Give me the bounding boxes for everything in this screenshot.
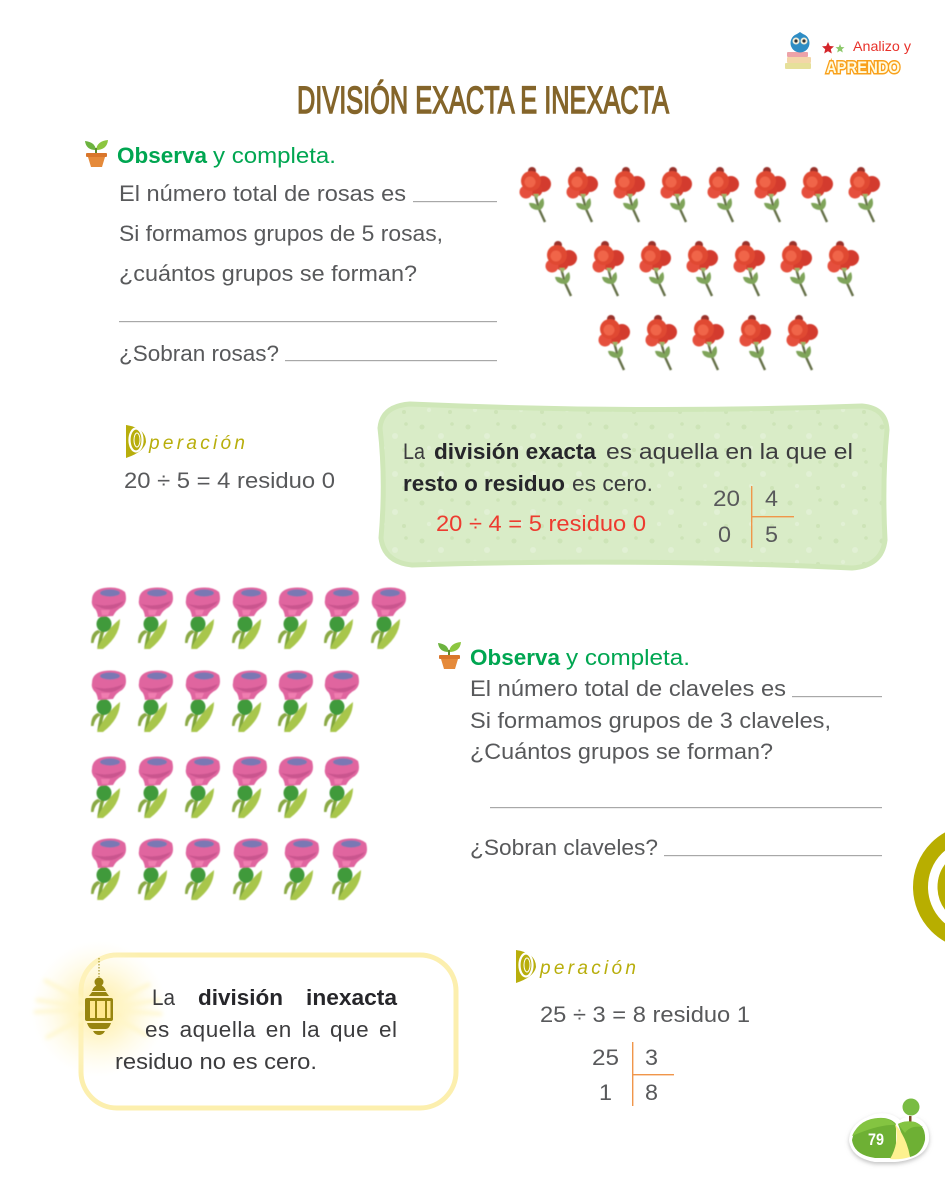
division layout: 25 (592, 1045, 619, 1070)
heading: Observa y completa (117, 143, 336, 168)
text: 20 ÷ 5: 20 ÷ 5 = 4 residuo 0 (124, 468, 335, 493)
icon: plant pot (85, 140, 108, 167)
decorative ring at right edge (920, 832, 945, 942)
heading: Observa y completa: Observa (470, 645, 560, 670)
definition text: es aquella en la que el (145, 1017, 397, 1042)
division layout (713, 486, 794, 548)
definition text: La (403, 439, 425, 464)
panel: división exacta (380, 404, 887, 568)
icon: Operación logo (516, 950, 636, 983)
definition text: división exacta (434, 439, 596, 464)
example in red: 20 ÷ 4 = 5 residuo 0 (436, 511, 646, 536)
answer line (285, 360, 497, 361)
heading: Observa y completa: y completa. (213, 143, 336, 168)
badge outline (849, 1113, 929, 1162)
icon: Operación logo: peración (539, 958, 636, 979)
icon: red star (822, 42, 834, 54)
division layout: 8 (645, 1080, 658, 1105)
definition text (403, 439, 853, 496)
answer line (119, 321, 497, 322)
answer line (490, 807, 882, 808)
lantern glow (31, 941, 167, 1077)
icon: owl on books (785, 32, 811, 69)
division layout: 4 (765, 486, 778, 511)
answer line (664, 855, 882, 856)
logo word: Aprendo: APRENDO (826, 58, 900, 77)
answer line (792, 696, 882, 697)
icon: plant pot (438, 642, 461, 669)
icon: green star (836, 44, 844, 52)
definition text: La (152, 985, 175, 1010)
page number: 79 (868, 1130, 884, 1149)
division layout: 3 (645, 1045, 658, 1070)
text: sobran claveles: ¿Sobran claveles? (470, 835, 658, 860)
panel: división inexacta (31, 941, 456, 1108)
text: grupos de 5 rosas: Si formamos grupos de 5 rosas, (119, 221, 443, 246)
icon: lantern (85, 958, 113, 1035)
division layout: 1 (599, 1080, 612, 1105)
division layout: 5 (765, 522, 778, 547)
illustration: 20 roses (520, 167, 880, 370)
heading: Observa y completa: y completa. (566, 645, 690, 670)
operation: carnations (516, 950, 750, 1106)
answer line (413, 201, 497, 202)
logo word: Analizo y: Analizo y (853, 38, 911, 54)
icon: Operación logo: peración (148, 433, 245, 454)
dotted yellow panel (81, 955, 456, 1108)
text: cuántos grupos: ¿Cuántos grupos se forman? (470, 739, 773, 764)
division layout: 20 (713, 486, 740, 511)
hills (852, 1118, 896, 1158)
operation: roses (124, 425, 335, 493)
text: cuántos grupos: ¿cuántos grupos se forman? (119, 261, 417, 286)
text: total de claveles: El número total de claveles es (470, 676, 786, 701)
panel: carnations exercise (438, 642, 882, 860)
definition text: resto o residuo (403, 471, 565, 496)
division layout (592, 1042, 674, 1106)
text: sobran rosas: ¿Sobran rosas? (119, 341, 279, 366)
text: 25 ÷ 3: 25 ÷ 3 = 8 residuo 1 (540, 1002, 750, 1027)
definition text: inexacta (306, 985, 397, 1010)
green blob panel (380, 404, 887, 568)
top-right logo: Analizo y Aprendo (785, 32, 911, 77)
title: DIVISIÓN EXACTA E INEXACTA (297, 79, 669, 122)
tree (900, 1096, 922, 1124)
text: total de rosas: El número total de rosas es (119, 181, 406, 206)
heading: Observa y completa (470, 645, 690, 670)
definition text: es cero. (572, 471, 653, 496)
definition text: es aquella en la que el (606, 439, 853, 464)
text: grupos de 3 claveles: Si formamos grupos de 3 claveles, (470, 708, 831, 733)
page number badge (849, 1096, 929, 1162)
icon: Operación logo (126, 425, 245, 458)
illustration: 25 carnations (91, 588, 406, 900)
panel: roses exercise (85, 140, 497, 366)
definition text: residuo no es cero. (115, 1049, 317, 1074)
definition text (115, 985, 397, 1074)
path (890, 1124, 910, 1159)
heading: Observa y completa: Observa (117, 143, 207, 168)
definition text: división (198, 985, 283, 1010)
division layout: 0 (718, 522, 731, 547)
